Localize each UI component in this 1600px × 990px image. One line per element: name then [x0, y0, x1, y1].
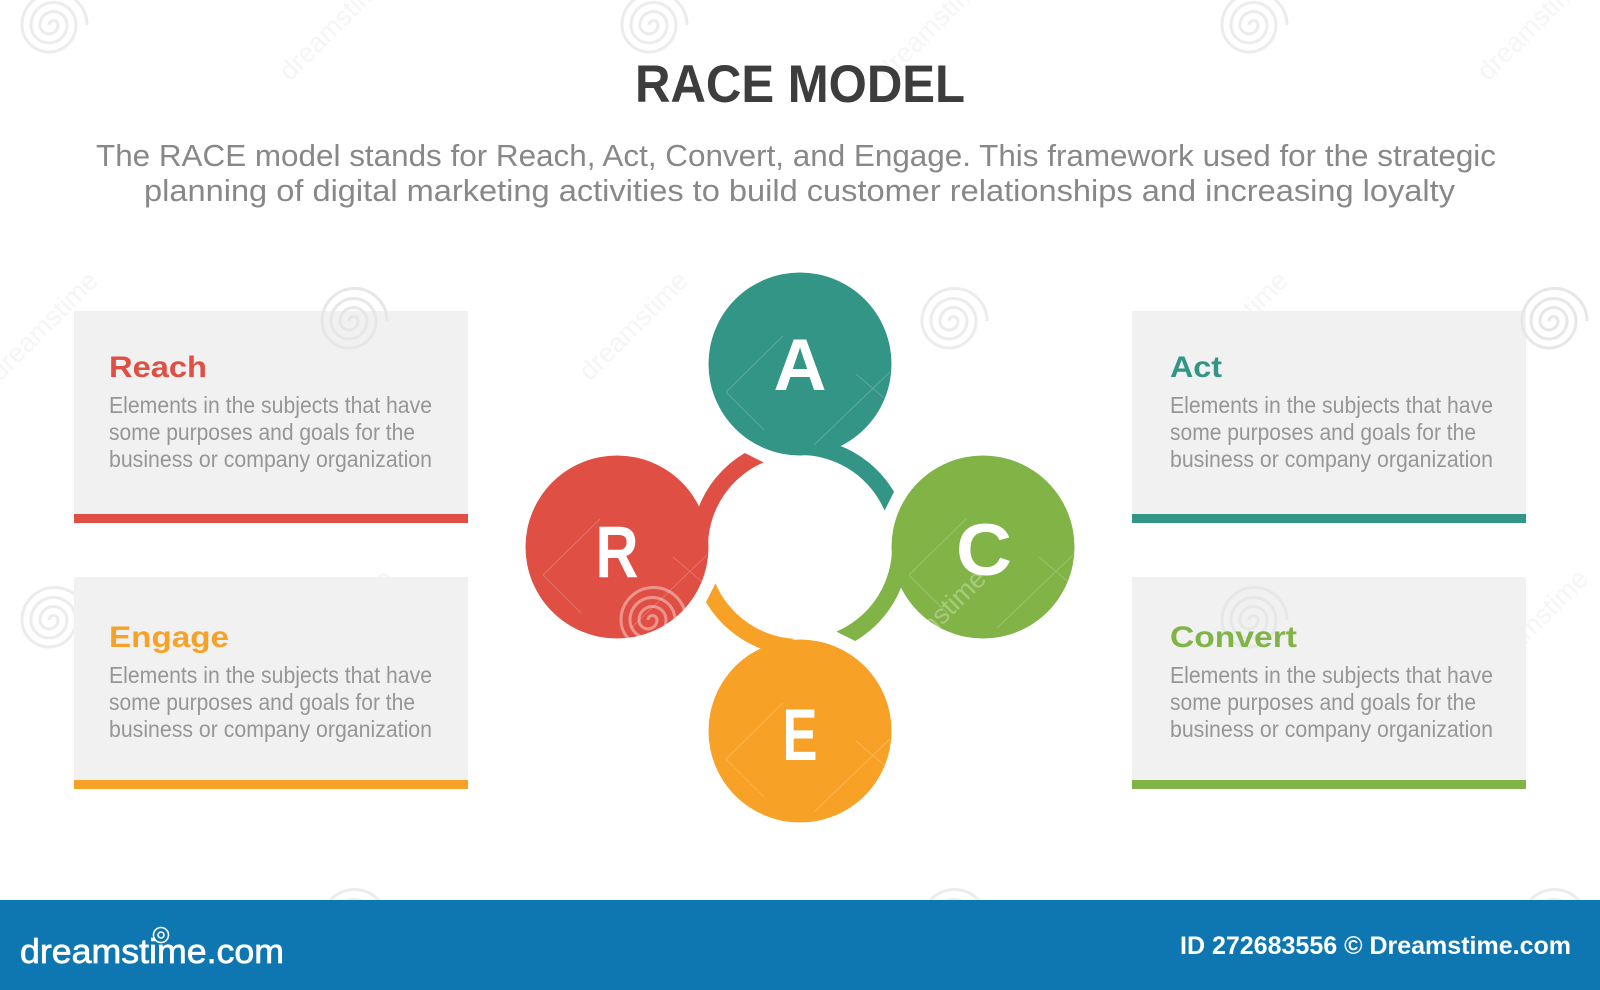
body text: Convert: business or company organization [1170, 716, 1493, 742]
background watermarks: dreamstime [1173, 265, 1294, 386]
body text: Reach: some purposes and goals for the [109, 419, 415, 445]
body text: Act: Elements in the subjects that have [1170, 392, 1493, 418]
panel: Act [1132, 288, 1587, 523]
circle: E: E [782, 695, 818, 776]
circle: A [708, 272, 892, 456]
background watermarks: dreamstime [573, 265, 694, 386]
footer logo: dreamstime.com [20, 933, 284, 971]
subtitle [96, 138, 1496, 208]
heading: Act: Act [1170, 351, 1222, 384]
watermark overlay: dreamstime [871, 563, 992, 684]
circle: R: R [596, 512, 638, 593]
body text: Convert: some purposes and goals for the [1170, 689, 1476, 715]
circle: C: C [956, 510, 1012, 591]
subtitle: planning of digital marketing activities to build customer relationships and increasing loyalty [144, 173, 1456, 208]
arrow: E to R [706, 583, 795, 650]
arrow: R to A [697, 453, 764, 542]
panel: Engage [74, 577, 468, 789]
footer image credit: ID 272683556 © Dreamstime.com [1180, 932, 1571, 960]
body text: Convert [1170, 662, 1493, 742]
RACE cycle diagram [526, 272, 1074, 822]
footer bar [0, 900, 1600, 990]
heading: Convert: Convert [1170, 621, 1297, 654]
body text: Engage: some purposes and goals for the [109, 689, 415, 715]
body text: Engage: business or company organization [109, 716, 432, 742]
background watermarks: dreamstime [278, 563, 399, 684]
body text: Reach [109, 392, 432, 472]
body text: Reach: Elements in the subjects that have [109, 392, 432, 418]
circle: C [892, 456, 1074, 638]
body text: Act: business or company organization [1170, 446, 1493, 472]
body text: Act [1170, 392, 1493, 472]
circle: E [708, 640, 892, 822]
heading: Reach: Reach [109, 351, 207, 384]
body text: Act: some purposes and goals for the [1170, 419, 1476, 445]
heading: Engage: Engage [109, 621, 229, 654]
body text: Engage: Elements in the subjects that have [109, 662, 432, 688]
body text: Convert: Elements in the subjects that have [1170, 662, 1493, 688]
circle: A: A [774, 325, 826, 406]
circle: R [526, 456, 708, 638]
arrow: A to C [805, 444, 894, 511]
background watermarks: dreamstime [1473, 563, 1594, 684]
watermark overlay [543, 336, 1073, 812]
title: RACE MODEL [635, 55, 965, 114]
panel: Reach [74, 288, 468, 523]
arrow: C to E [836, 552, 903, 641]
subtitle: The RACE model stands for Reach, Act, Convert, and Engage. This framework used for the strategic [96, 138, 1496, 173]
panel: Convert [1132, 577, 1526, 789]
body text: Reach: business or company organization [109, 446, 432, 472]
body text: Engage [109, 662, 432, 742]
